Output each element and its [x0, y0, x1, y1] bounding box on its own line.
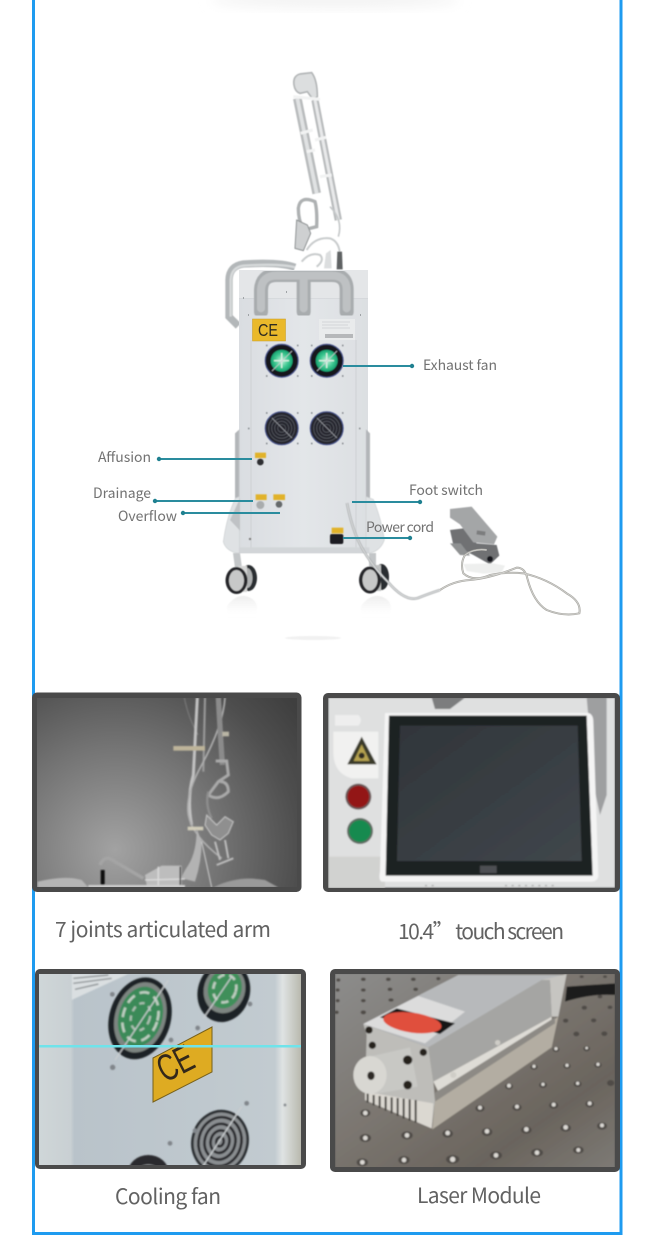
caption: articulated arm: 7 joints articulated arm	[55, 914, 271, 944]
heat sink fins	[368, 1093, 416, 1123]
panel: articulated arm photo	[32, 692, 302, 892]
caption: laser module: Laser Module	[417, 1180, 541, 1210]
panel: cooling fan photo	[35, 955, 306, 1192]
laser warning sign	[347, 737, 377, 764]
panel frame	[32, 692, 302, 892]
product label	[363, 996, 465, 1043]
caster: left	[226, 553, 257, 594]
callout: overflow	[118, 506, 280, 526]
specification label	[319, 319, 355, 340]
laser housing	[353, 974, 567, 1129]
screws	[110, 992, 286, 1146]
panel frame	[35, 969, 306, 1169]
cooling fan photo	[39, 955, 301, 1192]
cyan scan line	[39, 1045, 301, 1048]
panel: laser module photo	[330, 969, 620, 1172]
foot switch and cable	[347, 503, 580, 614]
laser module photo	[335, 973, 615, 1168]
touch screen photo	[328, 698, 615, 888]
mounting bolts	[365, 1026, 427, 1089]
panel frame	[323, 693, 620, 892]
callout: power cord: Power cord	[366, 517, 434, 537]
fan: bottom cut-off	[129, 1154, 168, 1165]
articulated arm	[293, 73, 343, 269]
callout: exhaust fan: Exhaust fan	[423, 355, 497, 375]
port: affusion	[255, 453, 266, 465]
floor reflection	[285, 636, 341, 640]
base and side panels	[223, 429, 384, 553]
callout: foot switch	[352, 480, 483, 504]
caster reflections	[227, 596, 391, 618]
cabinet body	[239, 270, 368, 553]
machine rear view	[223, 73, 580, 640]
foot pedal	[450, 507, 505, 574]
top face	[363, 975, 566, 1047]
port: overflow	[273, 494, 285, 508]
callout: exhaust fan	[343, 355, 497, 375]
channel ledge	[433, 1017, 552, 1092]
fan: top left	[265, 344, 298, 377]
callout: drainage	[93, 483, 253, 503]
caster: right	[359, 553, 389, 594]
caption: cooling fan: Cooling fan	[115, 1181, 221, 1211]
CE label	[150, 1027, 212, 1102]
triple handle	[261, 275, 347, 312]
callout: affusion	[98, 447, 252, 467]
connectors and ports	[249, 453, 343, 544]
front plate	[363, 1024, 435, 1128]
rear handle loop	[229, 263, 295, 326]
fan: top right	[310, 344, 343, 377]
arm photo	[37, 698, 297, 887]
callout: power cord	[343, 517, 434, 540]
port: drainage	[256, 494, 267, 509]
panel frame	[330, 969, 620, 1172]
fan: lower left	[265, 412, 298, 445]
side wall	[428, 980, 552, 1082]
callout: overflow: Overflow	[118, 506, 177, 526]
fan: right green	[196, 974, 252, 1024]
machine side cable	[347, 503, 440, 599]
caption: touch screen: 10.4” touch screen	[398, 916, 564, 946]
CE plate	[252, 319, 286, 341]
green button	[347, 818, 373, 844]
fan: left green	[107, 976, 173, 1060]
CE plate: CE	[258, 321, 278, 340]
fan: lower right	[310, 412, 343, 445]
port: power socket	[330, 528, 343, 544]
fan: lower black	[190, 1108, 250, 1165]
CE label: CE	[150, 1037, 201, 1090]
exhaust fans	[248, 344, 360, 445]
red button	[345, 784, 371, 810]
casters	[226, 553, 391, 618]
callout: drainage: Drainage	[93, 483, 151, 503]
foot switch cable loop	[440, 550, 580, 614]
faint shadow at top edge	[210, 0, 460, 8]
lower side	[432, 1017, 558, 1129]
panel: touch screen photo	[323, 693, 620, 892]
table holes	[335, 975, 614, 1166]
monitor bezel	[379, 713, 598, 882]
cylinder	[376, 1048, 417, 1092]
callout: foot switch: Foot switch	[409, 480, 483, 500]
callout: affusion: Affusion	[98, 447, 151, 467]
